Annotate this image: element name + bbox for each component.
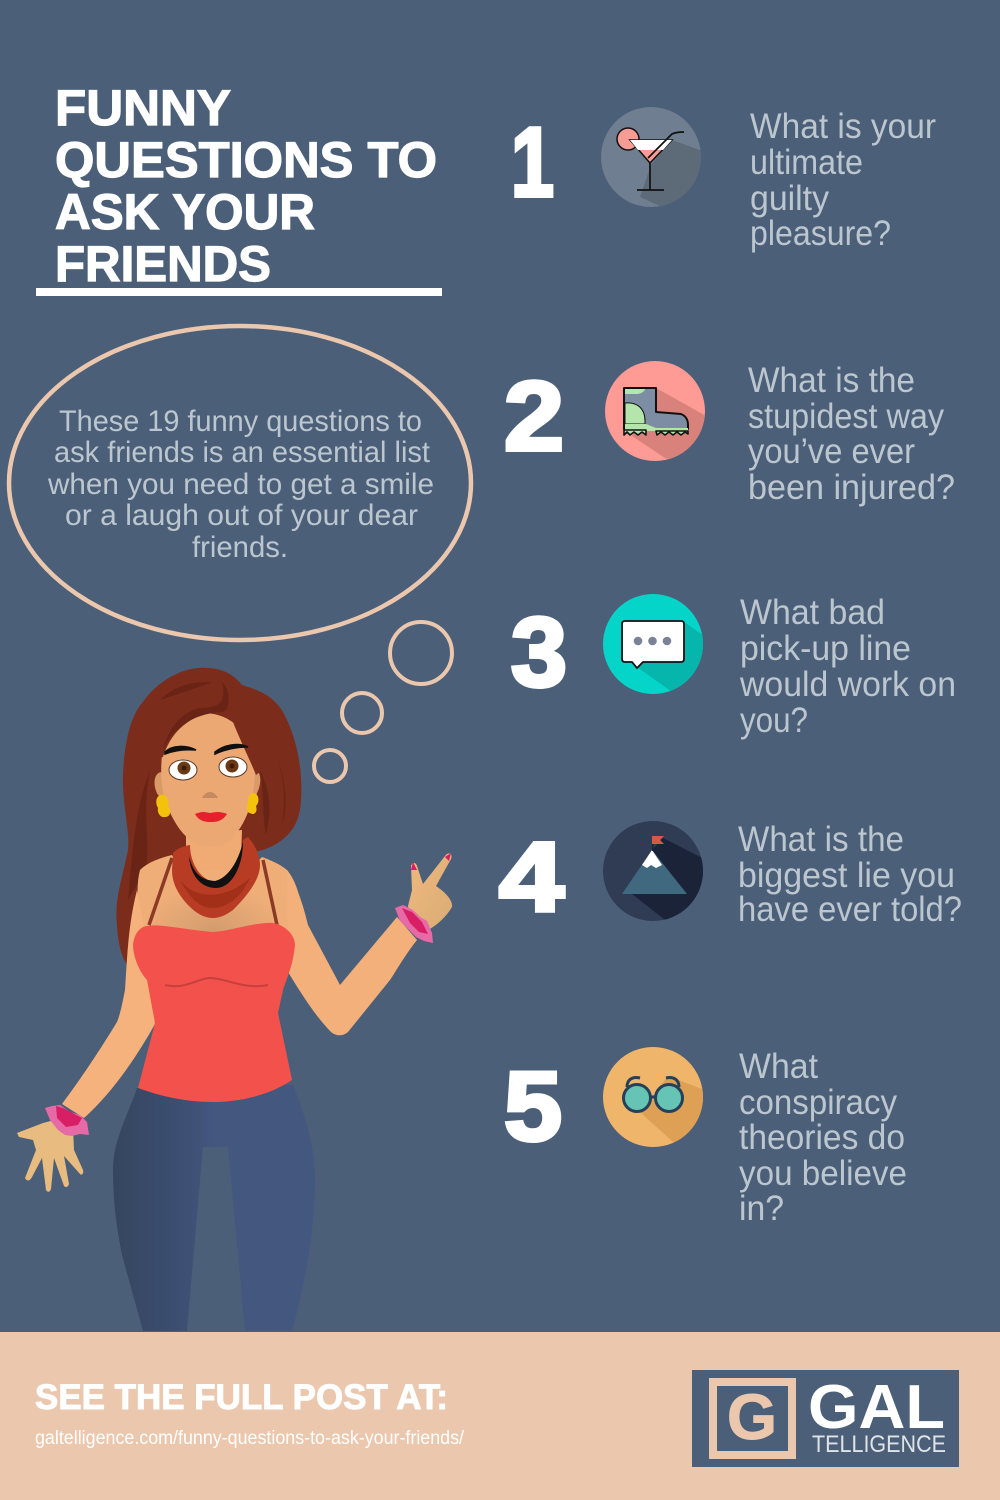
icon: mountain with flag: [603, 821, 703, 921]
thought bubble with intro text: when you need to get a smile: [47, 468, 434, 501]
question 5: 5: [504, 1051, 562, 1161]
question 1: 1: [511, 107, 554, 217]
question 2: you’ve ever: [748, 432, 915, 471]
question 5: What: [739, 1047, 818, 1086]
thought bubble with intro text: These 19 funny questions to: [59, 405, 422, 438]
title: [36, 80, 442, 296]
question 2: been injured?: [748, 468, 955, 507]
question 1: pleasure?: [750, 214, 891, 253]
thought bubble with intro text: [9, 326, 471, 640]
question 5: theories do: [739, 1118, 905, 1157]
nose: [202, 792, 218, 798]
question 4: biggest lie you: [738, 856, 955, 895]
back hair: [116, 668, 301, 966]
question 2: What is the: [748, 361, 915, 400]
woman illustration: [17, 668, 452, 1331]
neck: [186, 830, 242, 885]
question 5: in?: [739, 1189, 784, 1228]
top seam: [165, 978, 268, 986]
question 1: guilty: [750, 179, 829, 218]
straps: [149, 858, 277, 925]
question 5: conspiracy: [739, 1083, 897, 1122]
eyes: [169, 760, 197, 780]
icon: speech bubble: [603, 594, 703, 694]
earrings: [156, 795, 170, 817]
scarf inner shadow: [189, 842, 243, 888]
lips: [195, 812, 227, 822]
title: FUNNY: [55, 80, 231, 136]
title: FRIENDS: [55, 236, 271, 292]
logo: GAL: [808, 1373, 945, 1442]
question 1: What is your: [750, 107, 936, 146]
right arm: [287, 870, 417, 1035]
question 4: have ever told?: [738, 890, 962, 929]
question 4: 4: [499, 822, 564, 932]
shoulders and chest: [135, 855, 300, 960]
hair parting: [163, 682, 229, 750]
thought bubble with intro text: ask friends is an essential list: [54, 436, 431, 469]
thought bubble with intro text: or a laugh out of your dear: [65, 499, 418, 532]
footer url: galtelligence.com/funny-questions-to-ask-your-friends/: [35, 1428, 465, 1449]
scarf fold: [180, 878, 250, 908]
icon: martini: [601, 107, 705, 207]
icon: glasses: [603, 1047, 710, 1150]
question 3: pick-up line: [740, 629, 911, 668]
question 2: 2: [504, 361, 564, 471]
footer: [0, 1332, 1000, 1500]
thought bubble with intro text: friends.: [192, 531, 288, 564]
question 5: [504, 1047, 907, 1228]
hair shading: [128, 682, 286, 900]
left arm: [62, 890, 155, 1118]
raised hand: [408, 853, 452, 929]
question 3: you?: [740, 701, 808, 740]
chest shading: [147, 870, 279, 950]
top: [133, 923, 295, 1102]
question 2: stupidest way: [748, 397, 944, 436]
scarf: [172, 837, 260, 918]
question 5: you believe: [739, 1154, 907, 1193]
question 2: [504, 361, 955, 507]
lower hand: [17, 1118, 83, 1192]
question 3: would work on: [739, 665, 956, 704]
eyebrows: [165, 745, 248, 754]
question 4: What is the: [738, 820, 904, 859]
question 1: ultimate: [750, 143, 863, 182]
left scrunchie: [45, 1105, 89, 1136]
question 3: [511, 593, 956, 740]
question 3: What bad: [740, 593, 885, 632]
right scrunchie: [395, 905, 433, 943]
logo: [692, 1370, 959, 1467]
fringe hair: [150, 680, 275, 775]
face: [161, 713, 255, 847]
title: ASK YOUR: [55, 184, 315, 240]
logo: G: [727, 1381, 777, 1453]
question 3: 3: [511, 597, 567, 707]
icon: boot: [605, 361, 705, 461]
question 4: [498, 821, 961, 922]
nails: [411, 853, 451, 870]
question 1: [511, 107, 936, 253]
footer call to action: SEE THE FULL POST AT:: [35, 1378, 448, 1417]
thought bubble trail circles: [314, 622, 452, 782]
ears: [155, 770, 260, 800]
title: QUESTIONS TO: [55, 132, 437, 188]
jeans: [113, 1085, 315, 1331]
logo: TELLIGENCE: [812, 1431, 946, 1458]
